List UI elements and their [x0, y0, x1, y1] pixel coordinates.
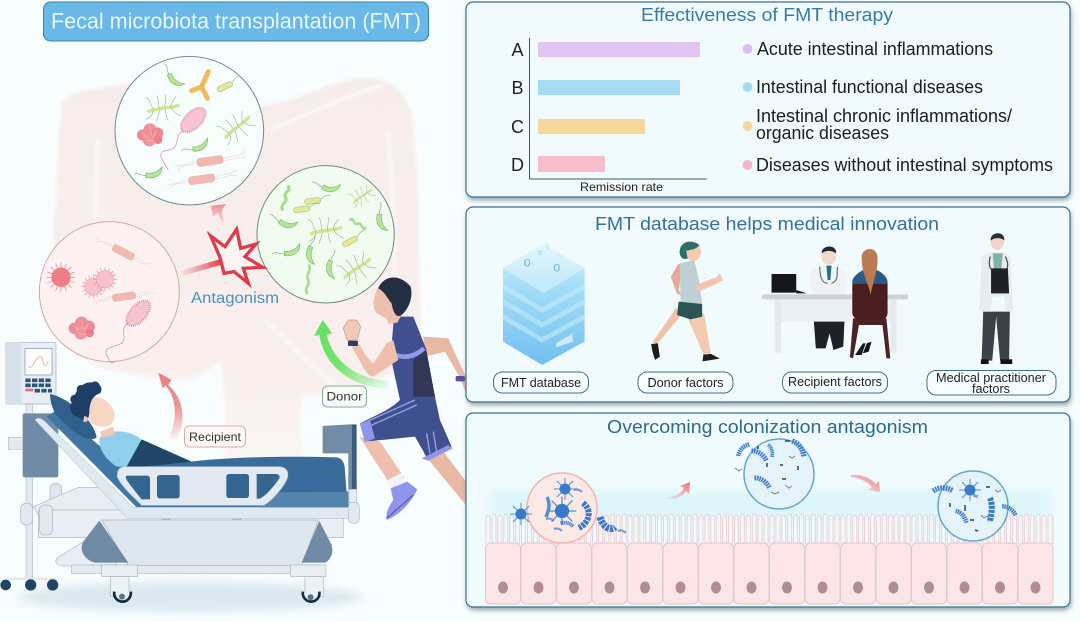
- panel: effectiveness of FMT therapy: [466, 2, 1070, 197]
- legend: Acute intestinal inflammations: [757, 39, 993, 59]
- icon: server: [503, 242, 585, 365]
- mucus band: [490, 492, 1050, 516]
- arrow: recipient: [158, 373, 183, 438]
- arrow: up to circle: [665, 482, 690, 499]
- mattress / blanket: [47, 410, 348, 507]
- label: Donor factors: [638, 372, 733, 393]
- bar chart: C: [511, 117, 524, 137]
- icon: server: 0: [553, 262, 561, 274]
- circle: FMT microbes: [735, 439, 814, 509]
- bed frame: [33, 487, 133, 518]
- label: Donor: [322, 386, 366, 407]
- circle: top microbiota: [115, 56, 264, 205]
- label: Recipient factors: [782, 372, 888, 393]
- head: [374, 287, 402, 324]
- pillow: [50, 394, 97, 439]
- icon: antagonism star: [182, 229, 263, 283]
- circle: donor microbiota: [257, 166, 398, 303]
- rear leg: [423, 452, 470, 510]
- bar chart: A: [511, 40, 524, 60]
- label: Medical practitioner factors: Medical practitioner: [936, 370, 1047, 385]
- label: FMT database: [494, 372, 588, 393]
- epithelium: [485, 513, 1054, 604]
- panel: FMT database: [466, 207, 1070, 402]
- heading: FMT database helps medical innovation: [595, 213, 939, 234]
- text: Antagonism: Antagonism: [191, 290, 279, 307]
- legend: Intestinal functional diseases: [756, 77, 983, 97]
- icon: consultation desk: [762, 246, 908, 358]
- icon: server: 0: [524, 257, 531, 269]
- circle: pathogenic microbes: [510, 473, 626, 543]
- icon: donor runner: [651, 242, 723, 361]
- label: Medical practitioner factors: [927, 370, 1056, 396]
- title: [44, 2, 428, 41]
- side rail: [117, 467, 288, 505]
- legend: [742, 39, 1053, 175]
- bar chart: [511, 38, 707, 194]
- monitor on pole: [0, 343, 58, 591]
- torso: [360, 317, 452, 460]
- bar chart: Remission rate: [580, 180, 663, 194]
- panel: colonization antagonism: [466, 413, 1070, 607]
- arrow: down from circle: [851, 475, 880, 492]
- bar chart: D: [511, 155, 524, 175]
- icon: medical practitioner: [979, 233, 1013, 364]
- back arm: [423, 337, 473, 395]
- title: Fecal microbiota transplantation (FMT): [51, 8, 421, 34]
- bed shadow: [18, 582, 362, 612]
- bar chart: B: [511, 78, 524, 98]
- arrow: donor: [314, 320, 388, 388]
- arrow: to top circle: [211, 204, 226, 228]
- icon: server: 0: [538, 249, 542, 257]
- label: Recipient: Recipient: [189, 430, 242, 444]
- hospital bed with patient: [0, 343, 359, 602]
- legend: Diseases without intestinal symptoms: [756, 155, 1053, 175]
- circle: recipient microbiota: [39, 222, 179, 363]
- runner (donor): [343, 277, 473, 520]
- front arm: [352, 340, 398, 377]
- label: Recipient: [184, 426, 246, 447]
- legend: organic diseases: [756, 123, 889, 143]
- scene: intestine: [50, 79, 421, 460]
- label: Recipient factors: Recipient factors: [788, 374, 882, 389]
- icon: server: 1: [545, 242, 550, 250]
- foot board: [323, 424, 357, 490]
- heading: Effectiveness of FMT therapy: [641, 5, 893, 25]
- label: FMT database: FMT database: [501, 375, 581, 390]
- circle: colonizing microbes: [933, 471, 1018, 541]
- label: Donor: Donor: [326, 390, 362, 404]
- label: Medical practitioner factors: factors: [972, 381, 1010, 396]
- legend: Intestinal chronic inflammations/: [756, 106, 1012, 126]
- front leg: [359, 437, 405, 487]
- patient: [99, 431, 143, 467]
- heading: Overcoming colonization antagonism: [607, 416, 928, 437]
- label: Donor factors: Donor factors: [648, 375, 724, 390]
